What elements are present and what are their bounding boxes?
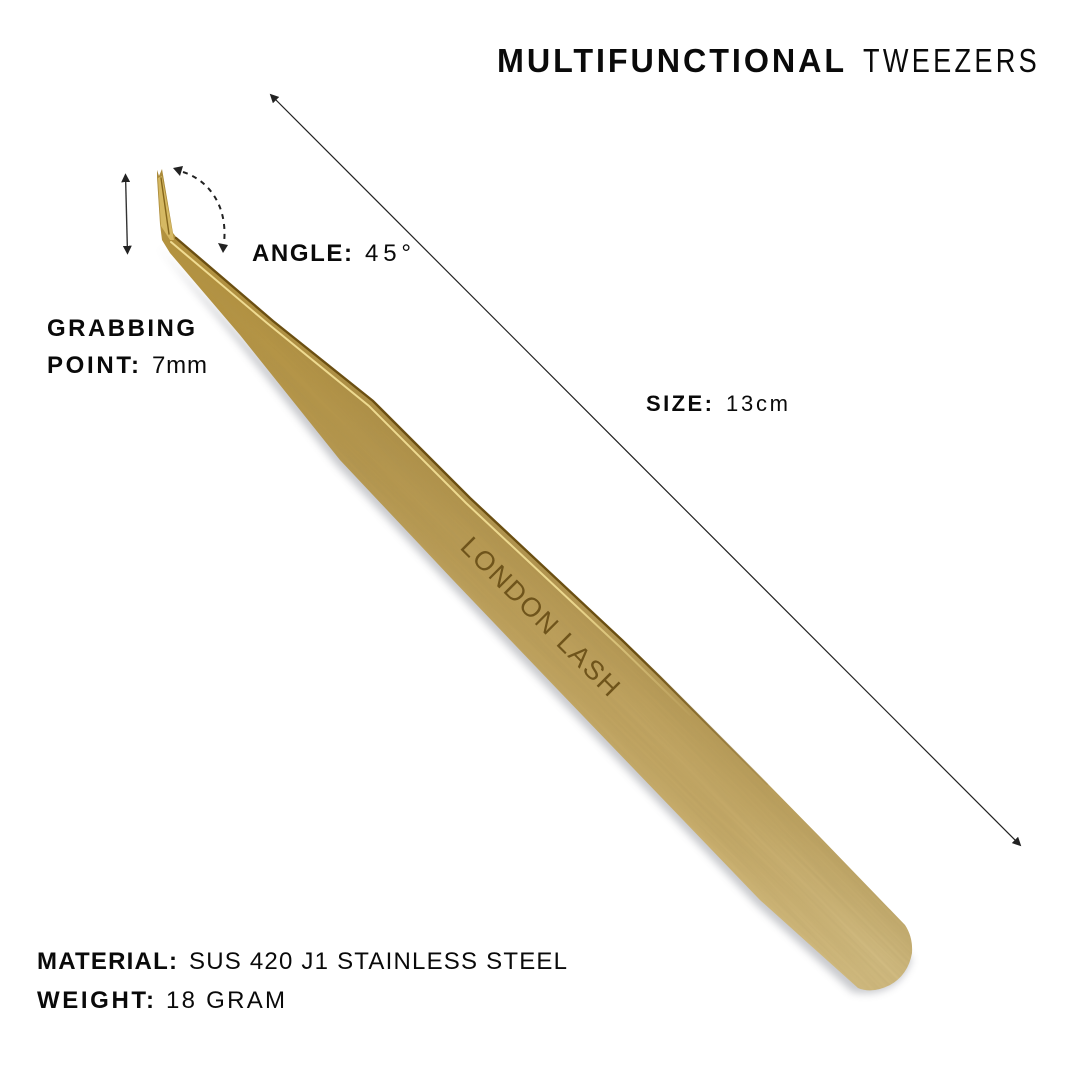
- label: material and weight: [37, 948, 567, 1014]
- tweezers body: [157, 169, 912, 990]
- label: material and weight: MATERIAL:: [37, 948, 177, 975]
- tweezers shadow: [158, 246, 912, 993]
- arrow: overall size: [271, 95, 1020, 845]
- tweezers: [157, 169, 914, 998]
- title: [497, 42, 1040, 79]
- label: grabbing point: [47, 315, 207, 379]
- label: size: SIZE:: [646, 391, 712, 416]
- label: size: 13cm: [726, 391, 788, 416]
- tweezers tip highlight: [158, 176, 174, 240]
- tweezers upper rail: [161, 178, 767, 784]
- label: grabbing point: 7mm: [152, 352, 207, 379]
- label: grabbing point: GRABBING: [47, 315, 195, 342]
- label: angle: ANGLE:: [252, 240, 352, 267]
- label: grabbing point: POINT:: [47, 352, 139, 379]
- arrow: grabbing point: [126, 175, 128, 253]
- label: material and weight: SUS 420 J1 STAINLESS STEEL: [189, 948, 567, 975]
- label: angle: [252, 240, 411, 267]
- label: size: [646, 391, 788, 416]
- tweezers shading: [157, 170, 912, 961]
- engraved brand: LONDON LASH: [455, 531, 626, 702]
- label: angle: 45°: [365, 240, 411, 267]
- label: material and weight: WEIGHT:: [37, 987, 154, 1014]
- label: material and weight: 18 GRAM: [166, 987, 285, 1014]
- title: TWEEZERS: [863, 42, 1040, 79]
- arrow: angle: [173, 166, 228, 253]
- title: MULTIFUNCTIONAL: [497, 42, 847, 79]
